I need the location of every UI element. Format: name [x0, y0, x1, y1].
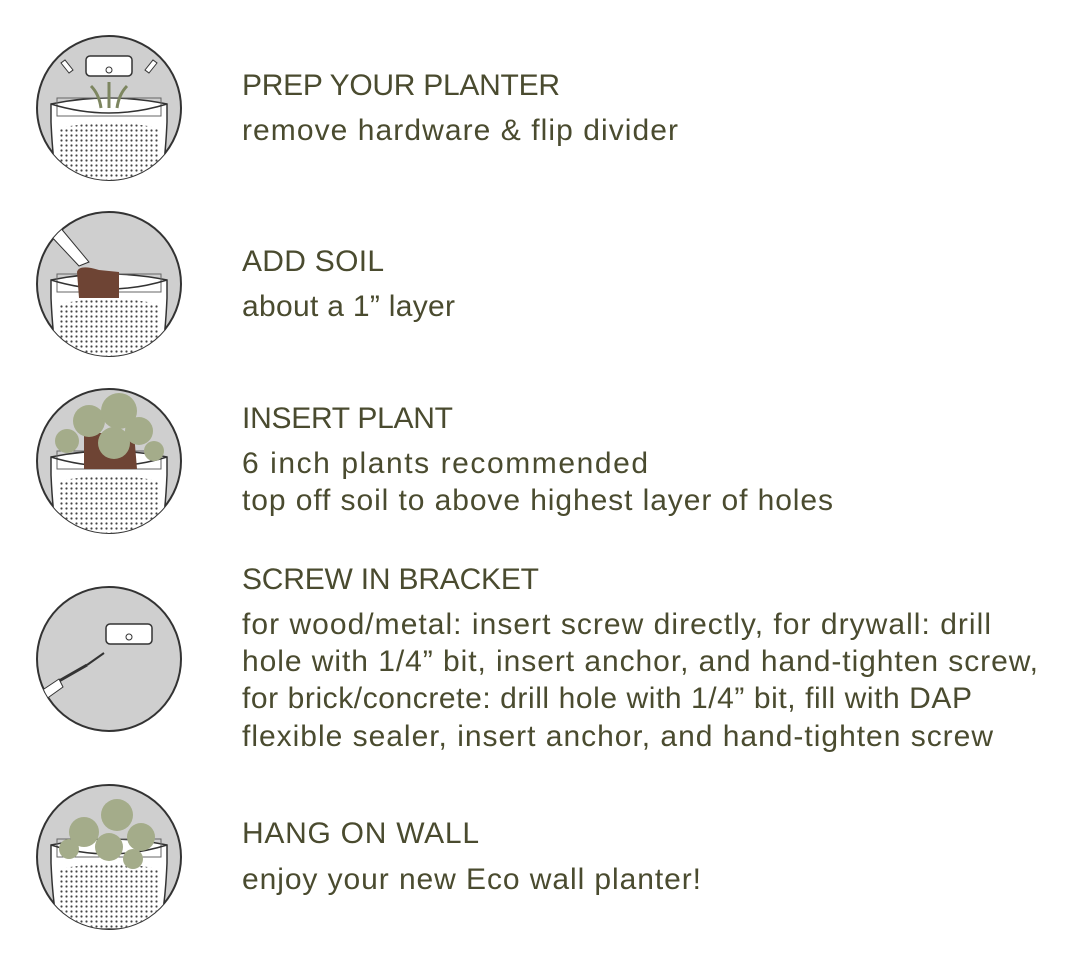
text: screw bracket: hole with 1/4” bit, insert anchor, and hand-tighten screw,	[242, 645, 1038, 678]
text: screw bracket	[242, 608, 1038, 753]
heading: insert plant: INSERT PLANT	[242, 402, 453, 435]
text: insert plant: 6 inch plants recommended	[242, 447, 648, 480]
text: screw bracket: for wood/metal: insert screw directly, for drywall: drill	[242, 608, 991, 641]
heading: add soil: ADD SOIL	[242, 245, 384, 278]
text: insert plant	[242, 447, 833, 517]
text: prep: remove hardware & flip divider	[242, 114, 678, 147]
text: screw bracket: flexible sealer, insert anchor, and hand-tighten screw	[242, 720, 993, 753]
icon: hang on wall	[37, 785, 181, 929]
icon: add soil	[37, 212, 181, 364]
icon: screw bracket	[29, 587, 181, 731]
heading: screw bracket: SCREW IN BRACKET	[242, 563, 539, 596]
icon: prep planter	[37, 36, 181, 188]
text: screw bracket: for brick/concrete: drill hole with 1/4” bit, fill with DAP	[242, 682, 972, 715]
heading: hang: HANG ON WALL	[242, 817, 479, 850]
heading: prep: PREP YOUR PLANTER	[242, 69, 560, 102]
text: insert plant: top off soil to above highest layer of holes	[242, 484, 833, 517]
icon: insert plant	[37, 389, 181, 541]
text: add soil: about a 1” layer	[242, 290, 455, 323]
text: hang: enjoy your new Eco wall planter!	[242, 863, 701, 896]
